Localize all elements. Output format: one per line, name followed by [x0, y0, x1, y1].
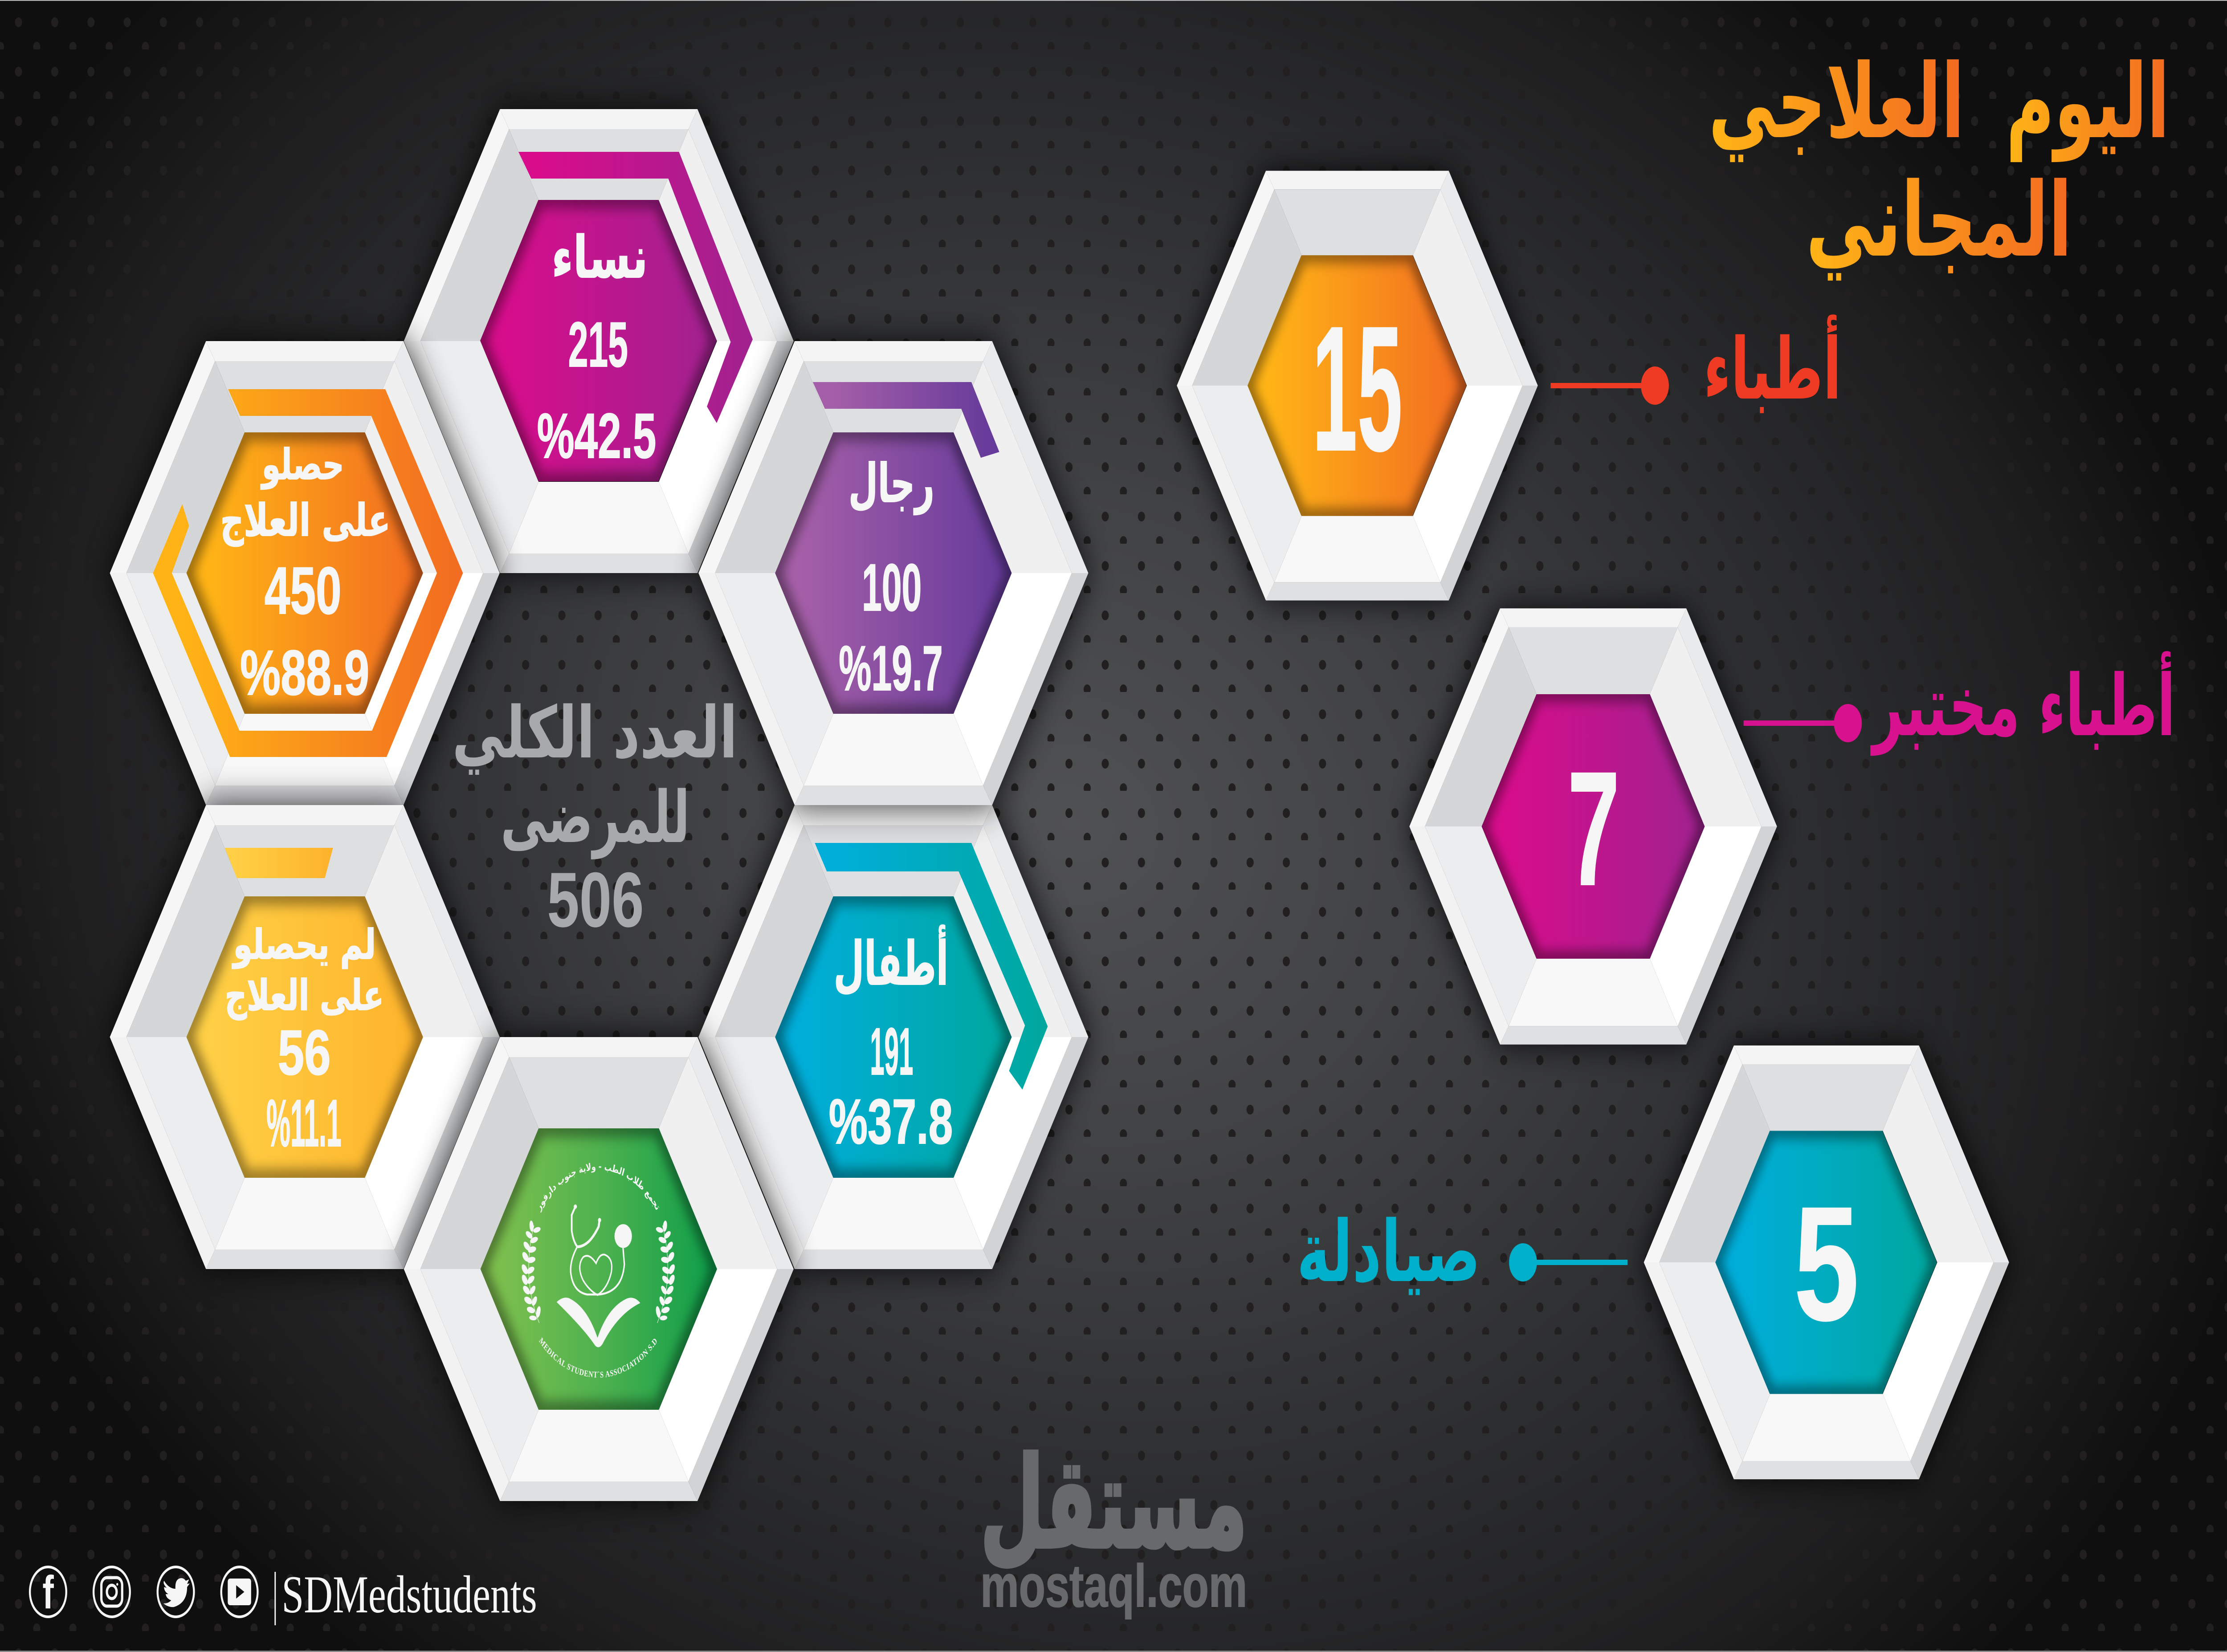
icon: youtube [221, 1567, 257, 1617]
inner hexagon: pharmacists [1715, 1131, 1937, 1394]
value: 100: 100 [862, 550, 922, 625]
title: free treatment day: اليوم [2006, 42, 2170, 162]
heading: total patients: 506 [547, 856, 644, 944]
value: 5: 5 [1794, 1173, 1859, 1355]
value: 215: 215 [568, 309, 628, 380]
panel: logo hexagon [404, 1037, 794, 1501]
logo laurel left [521, 1220, 542, 1323]
icon: facebook [30, 1567, 66, 1619]
social footer [30, 1565, 537, 1625]
inner hexagon: lab doctors [1482, 694, 1705, 959]
label: men: رجال [848, 452, 934, 515]
panel: men hexagon [698, 341, 1088, 805]
accent bar: not treated [225, 848, 333, 878]
label: women: نساء [552, 224, 648, 291]
inner hexagon: doctors [1248, 255, 1467, 516]
callout: doctors: أطباء [1704, 314, 1841, 419]
percent: 88.9: %88.9 [240, 637, 369, 708]
inner hexagon: men [775, 432, 1012, 714]
value: 56: 56 [278, 1017, 331, 1088]
label: received: حصلو [261, 440, 344, 490]
callout: pharmacists [1297, 1203, 1627, 1302]
percent: 42.5: %42.5 [537, 400, 656, 472]
title: free treatment day: المجاني [1806, 161, 2072, 281]
accent bar: received treatment [153, 389, 463, 757]
callout: pharmacists: صيادلة [1297, 1203, 1481, 1302]
label: children: أطفال [834, 924, 948, 999]
percent: 37.8: %37.8 [829, 1086, 953, 1157]
value: 15: 15 [1312, 289, 1403, 488]
watermark: mostaql: mostaql.com [980, 1553, 1247, 1620]
callout: lab doctors [1744, 651, 2175, 756]
heading: total patients: العدد الكلي [452, 692, 738, 775]
logo: medical students association [521, 1161, 676, 1379]
title: free treatment day [1709, 42, 2170, 281]
inner hexagon: received treatment [187, 432, 423, 714]
heading: total patients: للمرضى [501, 777, 690, 859]
icon: facebook: f [42, 1567, 54, 1619]
callout: lab doctors: أطباء مختبر [1870, 651, 2175, 756]
accent bar: women [518, 152, 753, 423]
logo arabic ring text: تجمع طلاب الطب - ولاية جنوب دارفور [534, 1161, 662, 1213]
inner hexagon: not treated [187, 896, 423, 1178]
heading: total patients [452, 692, 738, 944]
logo laurel right [655, 1220, 676, 1323]
panel: lab doctors hexagon [1409, 608, 1777, 1045]
panel: not treated hexagon [110, 805, 500, 1269]
percent: 19.7: %19.7 [839, 633, 943, 704]
value: 450: 450 [265, 553, 342, 628]
watermark: mostaql [980, 1431, 1247, 1620]
panel: children hexagon [698, 805, 1088, 1269]
accent bar: children [815, 843, 1048, 1090]
inner hexagon: women [480, 200, 717, 481]
label: did not receive: لم يحصلو [232, 920, 376, 969]
logo english ring text: MEDICAL STUDENT`S ASSOCIATION S.D [538, 1336, 659, 1379]
label: the treatment: على العلاج [225, 971, 384, 1020]
icon: twitter [158, 1567, 194, 1617]
panel: women hexagon [404, 109, 794, 573]
accent bar: men [813, 382, 999, 458]
watermark: mostaql: مستقل [980, 1431, 1247, 1576]
value: 191: 191 [870, 1014, 913, 1089]
title: free treatment day: العلاجي [1709, 42, 1965, 162]
icon: instagram [94, 1567, 130, 1617]
logo open book [557, 1298, 640, 1347]
panel: doctors hexagon [1177, 171, 1538, 600]
inner hexagon: children [775, 896, 1012, 1178]
footer handle: SDMedstudents [281, 1565, 537, 1624]
inner hexagon: logo [481, 1128, 717, 1410]
callout: doctors [1550, 314, 1841, 419]
panel: received treatment hexagon [110, 341, 500, 805]
panel: pharmacists hexagon [1644, 1046, 2009, 1479]
label: the treatment: على العلاج [220, 494, 391, 546]
logo stethoscope and heart [571, 1204, 632, 1295]
percent: 11.1: %11.1 [266, 1086, 342, 1160]
value: 7: 7 [1567, 738, 1620, 920]
